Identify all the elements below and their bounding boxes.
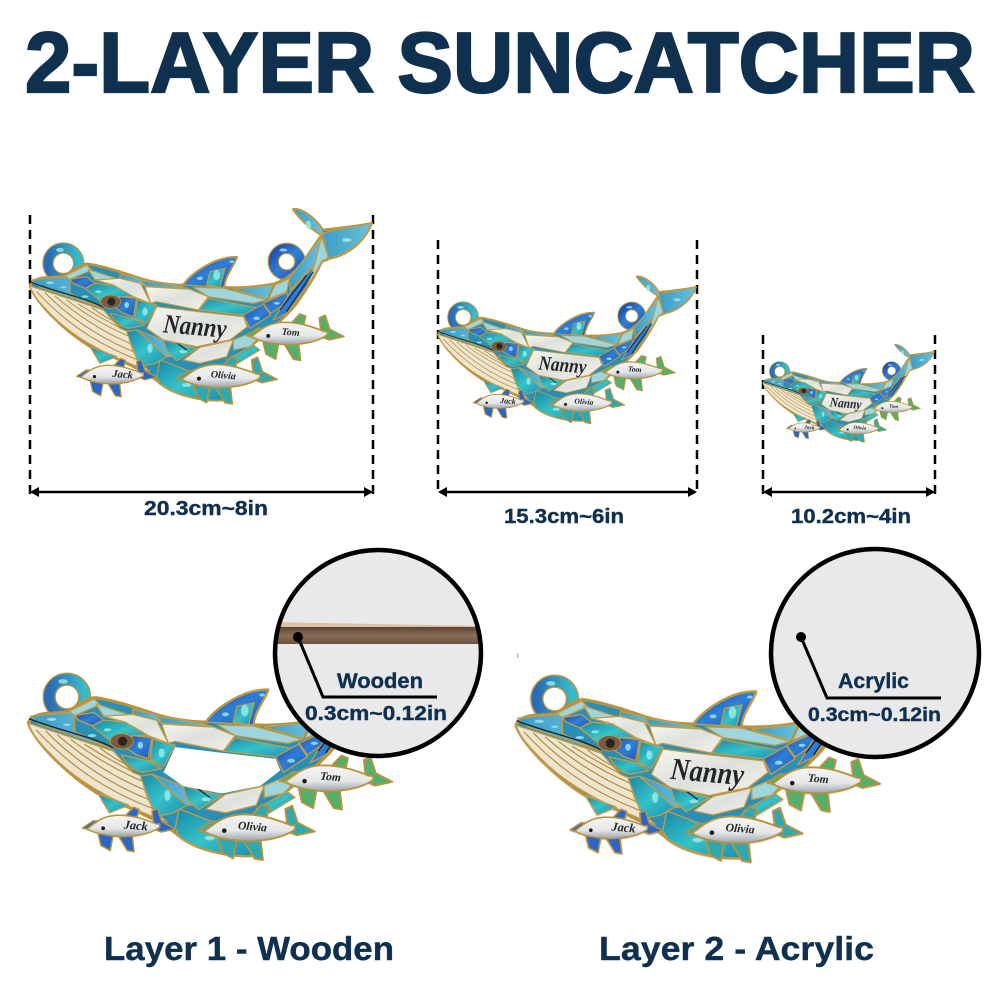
dimension guides 8in bbox=[30, 215, 373, 495]
layer 1: wooden whale without name plate: Olivia bbox=[237, 819, 268, 835]
title: 2-LAYER SUNCATCHER bbox=[25, 16, 975, 111]
size 6in: suncatcher with dimension lines bbox=[438, 240, 697, 528]
layer 2: acrylic whale with name: Tom bbox=[807, 772, 829, 786]
product: small whale: Olivia bbox=[853, 426, 867, 432]
arrow 4in bbox=[763, 487, 935, 497]
caption: layer 2: Layer 2 - Acrylic bbox=[599, 930, 874, 967]
layer 2: acrylic whale with name bbox=[516, 636, 912, 862]
product: small whale: Jack bbox=[803, 424, 815, 431]
product: small whale: Tom bbox=[889, 404, 898, 410]
size 8in: suncatcher with dimension lines bbox=[30, 209, 373, 520]
product: medium whale: Nanny bbox=[537, 352, 587, 378]
layer 1: wooden whale without name plate bbox=[28, 634, 424, 860]
layer 2: acrylic whale with name: Nanny bbox=[668, 751, 746, 792]
callout: wooden thickness magnifier bbox=[270, 550, 485, 756]
layer 2: acrylic whale with name: Jack bbox=[610, 819, 637, 836]
product: medium whale bbox=[438, 277, 696, 424]
layer 1: wooden whale without name plate: Jack bbox=[122, 817, 149, 834]
arrow 6in bbox=[438, 487, 697, 497]
product: medium whale: Tom bbox=[628, 364, 642, 374]
product: large whale bbox=[30, 209, 372, 404]
product: medium whale: Olivia bbox=[574, 396, 594, 407]
arrow 8in bbox=[30, 487, 373, 497]
label 4in: 10.2cm~4in bbox=[791, 506, 911, 528]
stray mark bbox=[517, 653, 518, 658]
callout: acrylic thickness magnifier bbox=[771, 549, 979, 757]
dimension guides 4in bbox=[763, 335, 935, 495]
caption: layer 1: Layer 1 - Wooden bbox=[104, 930, 394, 967]
product: small whale: Nanny bbox=[828, 394, 862, 412]
product: large whale: Tom bbox=[281, 327, 300, 339]
thickness label: 0.3cm~0.12in bbox=[305, 703, 447, 725]
product: medium whale: Jack bbox=[499, 396, 516, 406]
material label: Acrylic bbox=[838, 670, 909, 693]
wood edge sample bbox=[270, 622, 485, 644]
product: large whale: Jack bbox=[111, 369, 134, 382]
product: large whale: Olivia bbox=[210, 369, 236, 382]
dimension guides 6in bbox=[438, 240, 697, 495]
size 4in: suncatcher with dimension lines bbox=[763, 335, 935, 528]
label 8in: 20.3cm~8in bbox=[144, 498, 268, 520]
layer 1: wooden whale without name plate: Tom bbox=[320, 770, 342, 784]
leader line bbox=[798, 634, 941, 698]
layer 2: acrylic whale with name: Olivia bbox=[725, 821, 755, 837]
product: large whale: Nanny bbox=[161, 308, 228, 344]
label 6in: 15.3cm~6in bbox=[504, 506, 624, 528]
thickness label: 0.3cm~0.12in bbox=[808, 705, 941, 726]
material label: Wooden bbox=[337, 670, 423, 693]
leader line bbox=[294, 634, 437, 697]
product: small whale bbox=[763, 345, 934, 442]
